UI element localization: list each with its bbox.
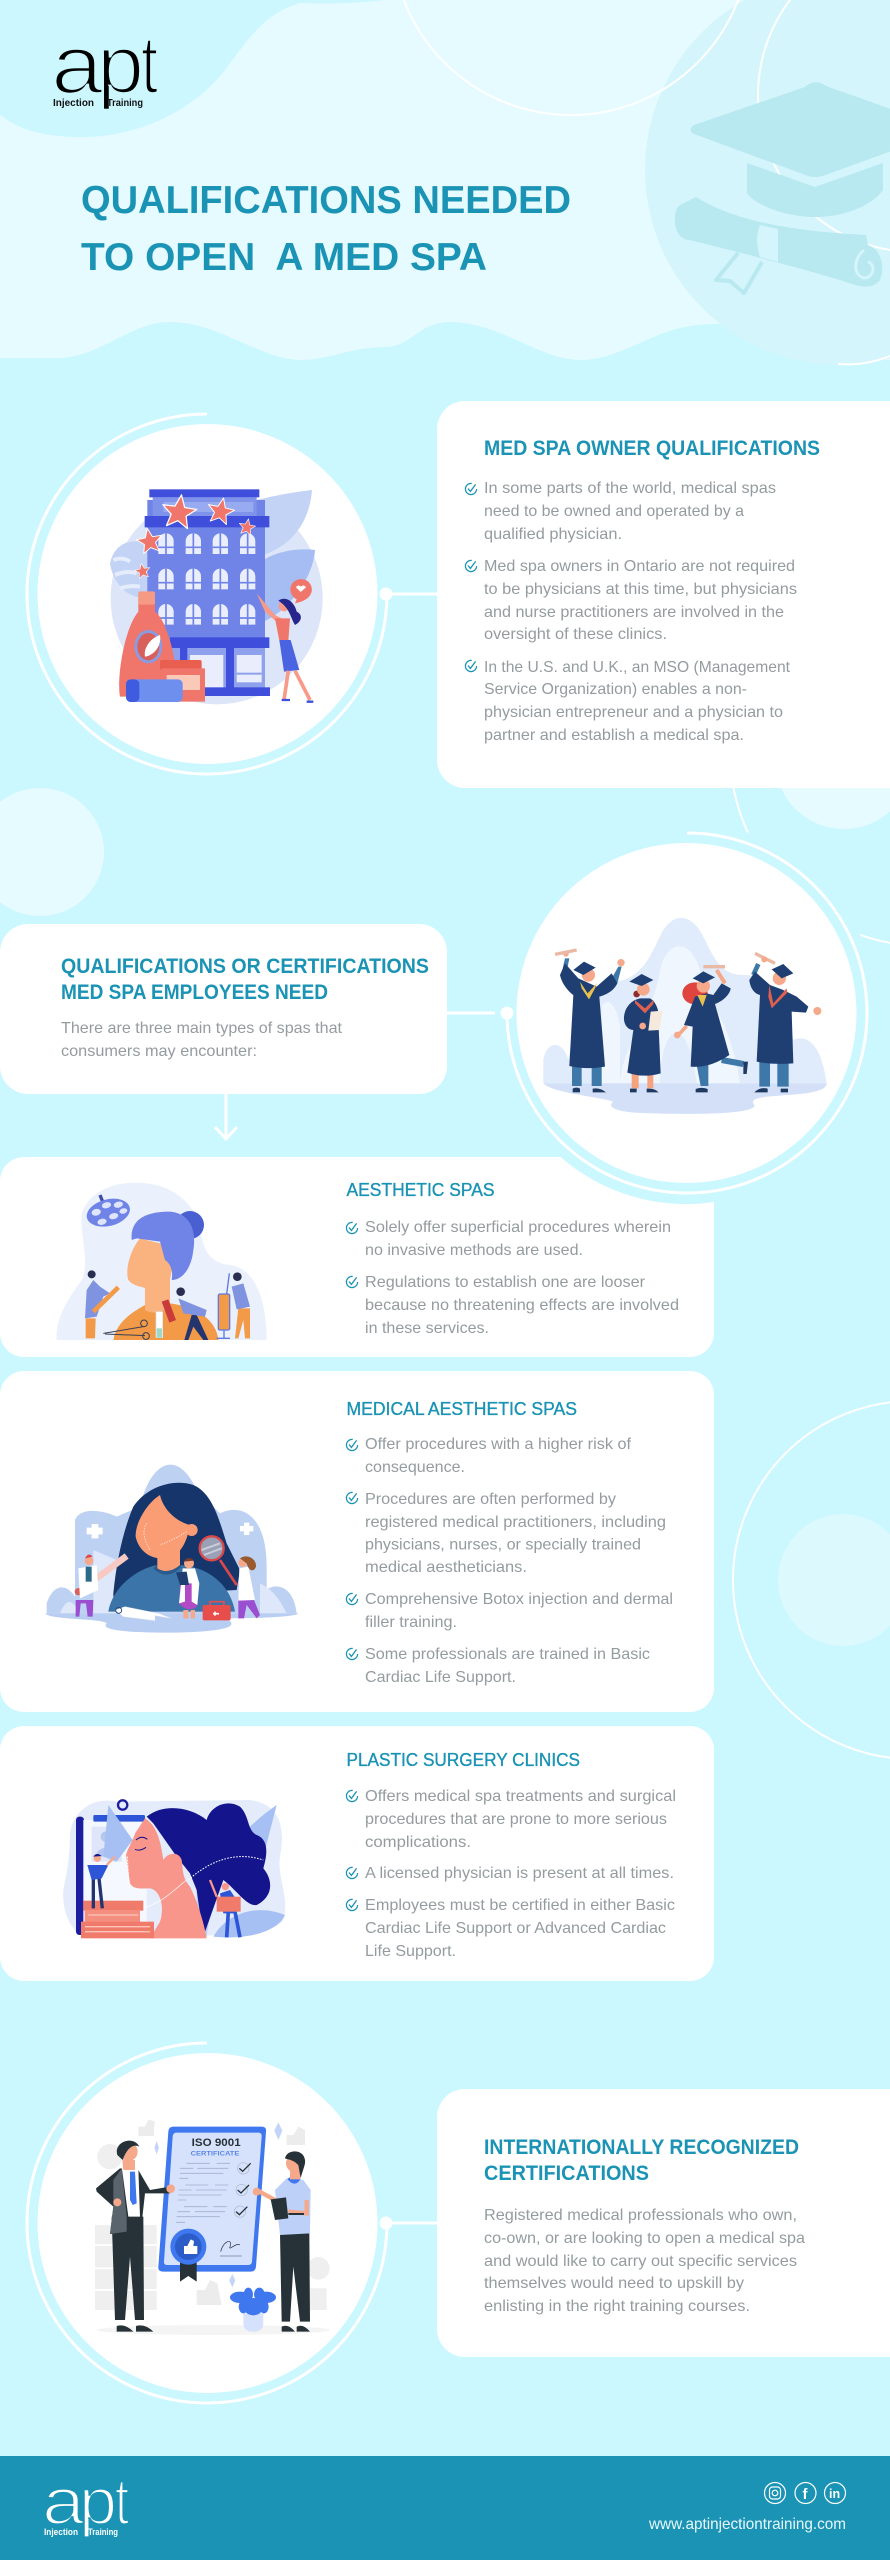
- bullet: certified employees: Cardiac Life Support or Advanced Cardiac: [365, 1920, 666, 1937]
- bullet: registered practitioners: [346, 1491, 666, 1576]
- bullet: surgical procedures: complications.: [365, 1834, 471, 1851]
- heading: certifications: CERTIFICATIONS: [484, 2162, 649, 2185]
- footer logo: [42, 2464, 129, 2538]
- bullet: surgical procedures: Offers medical spa treatments and surgical: [365, 1788, 676, 1805]
- bullet: looser regulations: [346, 1274, 679, 1337]
- illustration: aesthetic spa head and nurses: [57, 1183, 267, 1340]
- bullet: surgical procedures: procedures that are prone to more serious: [365, 1811, 667, 1828]
- illustration: medical aesthetic patient and doctors: [45, 1465, 298, 1633]
- panel: plastic surgery clinics: [0, 1726, 714, 1981]
- bullet: looser regulations: in these services.: [365, 1320, 489, 1337]
- bullet: Botox and filler training: filler training.: [365, 1614, 457, 1631]
- title: QUALIFICATIONS NEEDED: [81, 179, 571, 222]
- heading: employee qualifications: QUALIFICATIONS OR CERTIFICATIONS: [61, 955, 429, 978]
- footer logo: a: [42, 2464, 85, 2538]
- footer logo: Training: [88, 2527, 118, 2537]
- body text: certifications: co-own, or are looking to open a medical spa: [484, 2230, 805, 2247]
- bullet: registered practitioners: Procedures are often performed by: [365, 1491, 616, 1508]
- title: [81, 179, 571, 279]
- intro text: There are three main types of spas that: [61, 1020, 343, 1037]
- icon: linkedin: in: [829, 2487, 840, 2501]
- figure: man with folder: [210, 1880, 241, 1937]
- body text: certifications: enlisting in the right training courses.: [484, 2298, 750, 2315]
- header background with wave: [0, 0, 890, 365]
- figure: right doctor: [238, 1556, 260, 1618]
- footer logo: Injection: [44, 2527, 78, 2537]
- bullet: cardiac life support: [346, 1646, 650, 1686]
- figure: left nurse: [85, 1270, 118, 1338]
- bullet: owned and operated by physician: qualified physician.: [484, 526, 622, 543]
- heading: owner qualifications: MED SPA OWNER QUALIFICATIONS: [484, 437, 820, 460]
- icon: instagram: [764, 2482, 786, 2504]
- logo: apt injection training: [51, 18, 158, 111]
- figure: man on books: [87, 1854, 115, 1908]
- icon: diploma scroll: [675, 197, 882, 293]
- intro text: consumers may encounter:: [61, 1043, 257, 1060]
- bullet: Botox and filler training: Comprehensive Botox injection and dermal: [365, 1591, 673, 1608]
- figure: graduate 3: [674, 967, 748, 1092]
- body text: certifications: themselves would need to upskill by: [484, 2275, 744, 2292]
- title: TO OPEN A MED SPA: [81, 236, 487, 279]
- figure: graduate 4: [749, 953, 821, 1092]
- bullet: superficial procedures: Solely offer superficial procedures wherein: [365, 1219, 671, 1236]
- bullet: certified employees: Life Support.: [365, 1943, 456, 1960]
- figure: left doctor: [76, 1555, 98, 1617]
- certificate: [158, 2127, 266, 2282]
- bullet: MSO in U.S. and U.K.: Service Organization) enables a non-: [484, 681, 747, 698]
- figure: graduate 2: [624, 974, 663, 1092]
- body text: certifications: and would like to carry out specific services: [484, 2253, 797, 2270]
- heading: medical aesthetic spas: MEDICAL AESTHETIC SPAS: [346, 1399, 577, 1419]
- icon: potted plant: [230, 2288, 276, 2332]
- figure: businessman: [96, 2141, 175, 2332]
- bullet: higher risk: Offer procedures with a higher risk of: [365, 1436, 632, 1453]
- bullet: certified employees: Employees must be certified in either Basic: [365, 1897, 675, 1914]
- logo: apt injection training: Injection: [53, 97, 94, 109]
- bullet: MSO in U.S. and U.K.: [465, 659, 791, 744]
- heading: employee qualifications: [61, 955, 429, 1004]
- circle: graduates backdrop: [495, 822, 877, 1204]
- illustration: ISO 9001 certificate and two professionals: [95, 2119, 330, 2335]
- bullet: registered practitioners: medical aestheticians.: [365, 1559, 527, 1576]
- bullet: MSO in U.S. and U.K.: physician entrepreneur and a physician to: [484, 704, 783, 721]
- bullet: registered practitioners: physicians, nurses, or specially trained: [365, 1536, 641, 1554]
- logo: apt injection training: p: [97, 18, 144, 111]
- footer band: [0, 2456, 890, 2560]
- bullet: superficial procedures: [346, 1219, 671, 1259]
- bullet: higher risk: consequence.: [365, 1459, 465, 1476]
- logo: apt injection training: t: [141, 18, 158, 111]
- bullet: registered practitioners: registered medical practitioners, including: [365, 1514, 666, 1531]
- body text: certifications: Registered medical professionals who own,: [484, 2207, 797, 2224]
- certificate: ISO 9001: [192, 2137, 241, 2149]
- bullet: Botox and filler training: [346, 1591, 673, 1631]
- panel: medical aesthetic spas: [0, 1371, 714, 1712]
- bullet: Ontario owners: Med spa owners in Ontario are not required: [484, 558, 795, 575]
- bullet: looser regulations: because no threatening effects are involved: [365, 1297, 679, 1314]
- bullet: looser regulations: Regulations to establish one are looser: [365, 1274, 646, 1291]
- figure: graduate 1: [555, 950, 625, 1092]
- background circles and rings, middle and lower right: [0, 556, 890, 1759]
- icon: facebook: [795, 2482, 816, 2504]
- logo: apt injection training: a: [51, 18, 104, 111]
- panel: med spa owner qualifications: [437, 401, 890, 788]
- footer logo: p: [79, 2464, 117, 2538]
- connector: employees card to circle 2: [445, 1012, 507, 1014]
- icon: graduation cap: [690, 82, 890, 217]
- bullet: superficial procedures: no invasive methods are used.: [365, 1242, 583, 1259]
- bullet: owned and operated by physician: need to be owned and operated by a: [484, 503, 744, 520]
- bullet: Ontario owners: oversight of these clinics.: [484, 626, 667, 643]
- bullet: cardiac life support: Some professionals are trained in Basic: [365, 1646, 650, 1663]
- logo: apt injection training: Training: [107, 97, 143, 109]
- panel: aesthetic spas: [0, 1157, 714, 1357]
- bullet: licensed physician present: A licensed physician is present at all times.: [365, 1865, 674, 1882]
- panel: employee qualifications intro: [0, 924, 447, 1094]
- heading: certifications: [484, 2136, 799, 2185]
- icon: first aid kit: [203, 1602, 231, 1620]
- figure: right nurse: [217, 1272, 250, 1338]
- heading: plastic surgery clinics: PLASTIC SURGERY CLINICS: [346, 1750, 580, 1770]
- heading: aesthetic spas: AESTHETIC SPAS: [346, 1180, 494, 1200]
- bullet: MSO in U.S. and U.K.: partner and establish a medical spa.: [484, 727, 744, 744]
- bullet: Ontario owners: and nurse practitioners are involved in the: [484, 604, 784, 621]
- icon: facebook: f: [802, 2486, 808, 2503]
- illustration: four graduates: [543, 918, 827, 1114]
- figure: nurse with clipboard: [253, 2151, 311, 2332]
- icon: linkedin: [824, 2482, 846, 2504]
- bullet: surgical procedures: [346, 1788, 676, 1851]
- illustration: med spa building: [110, 489, 323, 704]
- intro text: [61, 1020, 343, 1060]
- certificate: CERTIFICATE: [191, 2150, 240, 2157]
- circle: owner illustration backdrop: [27, 414, 392, 774]
- arrow: down to spa types: [215, 1094, 237, 1139]
- bullet: owned and operated by physician: [465, 480, 776, 543]
- connector: circle 1 to owner card: [387, 592, 440, 596]
- body text: certifications: [484, 2207, 805, 2315]
- bullet: Ontario owners: [465, 558, 797, 643]
- bullet: Ontario owners: to be physicians at this time, but physicians: [484, 581, 797, 598]
- website url: www.aptinjectiontraining.com: [648, 2516, 846, 2533]
- heading: certifications: INTERNATIONALLY RECOGNIZED: [484, 2136, 799, 2159]
- bullet: owned and operated by physician: In some parts of the world, medical spas: [484, 480, 776, 497]
- panel: internationally recognized certifications: [437, 2089, 890, 2357]
- bullet: cardiac life support: Cardiac Life Support.: [365, 1669, 516, 1686]
- bullet: certified employees: [346, 1897, 675, 1960]
- heading: employee qualifications: MED SPA EMPLOYEES NEED: [61, 981, 328, 1004]
- bullet: MSO in U.S. and U.K.: In the U.S. and U.K., an MSO (Management: [484, 659, 791, 676]
- figure: middle nurse: [176, 1287, 208, 1340]
- figure: middle doctor: [176, 1558, 199, 1618]
- bullet: higher risk: [346, 1436, 632, 1476]
- footer logo: t: [115, 2464, 129, 2538]
- illustration: plastic surgery face profile: [63, 1800, 285, 1938]
- circle: certificate illustration backdrop: [27, 2043, 392, 2403]
- connector: circle 3 to certifications card: [387, 2222, 440, 2224]
